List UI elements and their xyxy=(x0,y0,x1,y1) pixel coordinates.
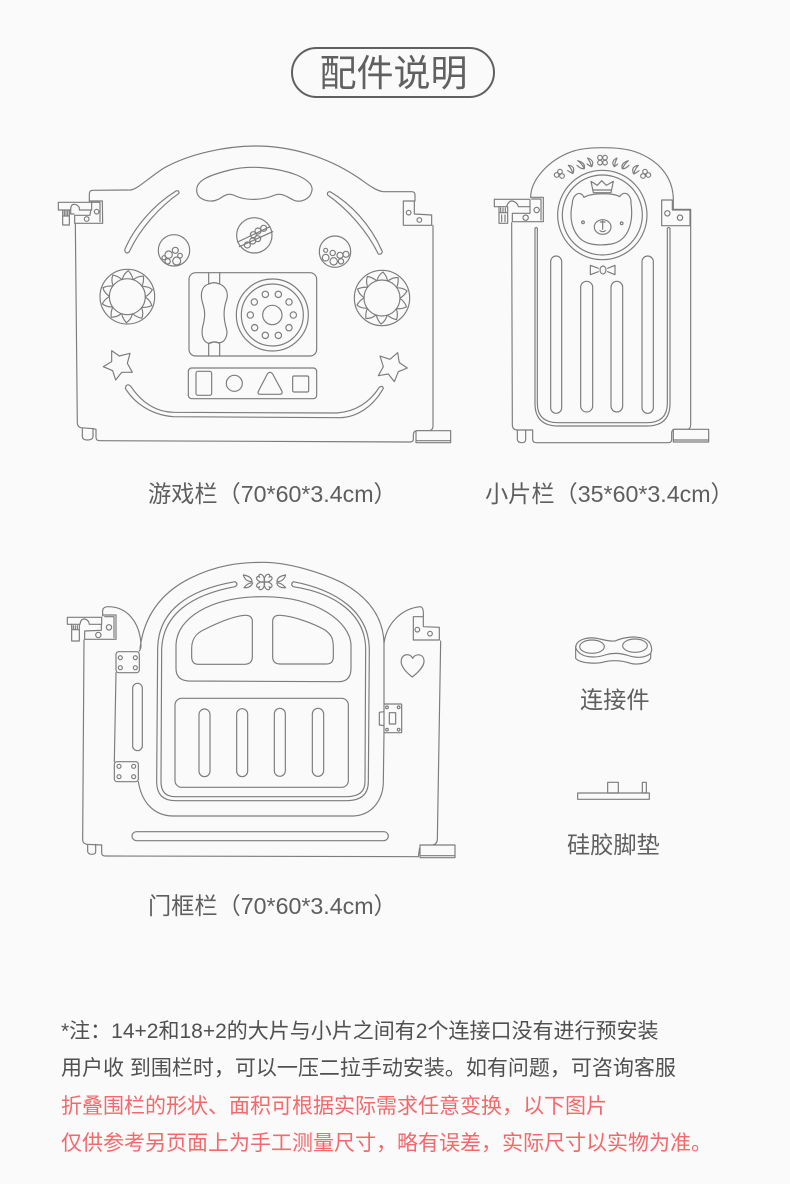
label: gate fence: 门框栏（70*60*3.4cm） xyxy=(148,893,397,919)
silicone foot pad part xyxy=(578,782,649,799)
bear porthole xyxy=(558,170,647,260)
left connector clip xyxy=(67,615,116,641)
label: connector: 连接件 xyxy=(580,687,650,713)
foot pad right xyxy=(416,431,451,443)
star right xyxy=(378,353,407,382)
note text: 折叠围栏的形状、面积可根据实际需求任意变换，以下图片 xyxy=(61,1095,607,1118)
note text: 用户收 到围栏时，可以一压二拉手动安装。如有问题，可咨询客服 xyxy=(61,1057,676,1080)
top panel xyxy=(176,597,351,682)
panel: gate fence xyxy=(67,562,455,858)
foot left xyxy=(82,429,93,440)
side slot xyxy=(133,683,142,751)
left connector clip xyxy=(494,197,543,223)
inner u slot xyxy=(535,227,670,426)
label: silicone pad: 硅胶脚垫 xyxy=(567,832,660,858)
note text: 仅供参考另页面上为手工测量尺寸，略有误差，实际尺寸以实物为准。 xyxy=(61,1132,712,1155)
lower panel xyxy=(175,698,348,787)
note text xyxy=(61,1020,712,1155)
foot left xyxy=(88,844,96,854)
hinge bottom xyxy=(114,762,138,782)
label: play fence: 游戏栏（70*60*3.4cm） xyxy=(148,481,397,507)
title xyxy=(292,48,494,97)
handle xyxy=(197,167,312,201)
bead circle left xyxy=(158,235,190,266)
sun wheel left xyxy=(100,269,155,324)
foot pad right xyxy=(673,429,709,442)
bead circle center xyxy=(237,218,273,253)
window right xyxy=(273,615,333,664)
door frame slot xyxy=(157,582,369,801)
bow xyxy=(590,265,615,275)
fence outline xyxy=(512,148,691,443)
bead circle right xyxy=(319,236,351,267)
activity panel xyxy=(189,273,317,356)
left connector clip xyxy=(58,201,103,225)
heart xyxy=(401,655,424,677)
right bracket xyxy=(662,200,690,226)
fence outline xyxy=(75,146,433,442)
clover ornament xyxy=(243,573,286,591)
bottom slot xyxy=(132,832,388,841)
connector part xyxy=(576,637,652,664)
arc slots xyxy=(125,191,179,253)
hinge top xyxy=(116,652,139,673)
gate outline xyxy=(83,562,441,857)
star left xyxy=(103,351,132,380)
foot pad right xyxy=(420,845,455,858)
title: 配件说明 xyxy=(320,53,468,94)
smile slot xyxy=(125,385,383,418)
sun wheel right xyxy=(354,270,410,326)
foot left xyxy=(517,430,526,443)
note text: *注：14+2和18+2的大片与小片之间有2个连接口没有进行预安装 xyxy=(61,1020,658,1043)
latch xyxy=(379,704,402,733)
panel: play fence xyxy=(58,146,451,443)
panel: small fence xyxy=(494,148,709,443)
window left xyxy=(192,615,252,664)
leaf garland xyxy=(554,155,651,178)
shape sorter xyxy=(188,368,317,399)
label: small fence: 小片栏（35*60*3.4cm） xyxy=(485,481,734,507)
vertical slots xyxy=(551,256,653,413)
